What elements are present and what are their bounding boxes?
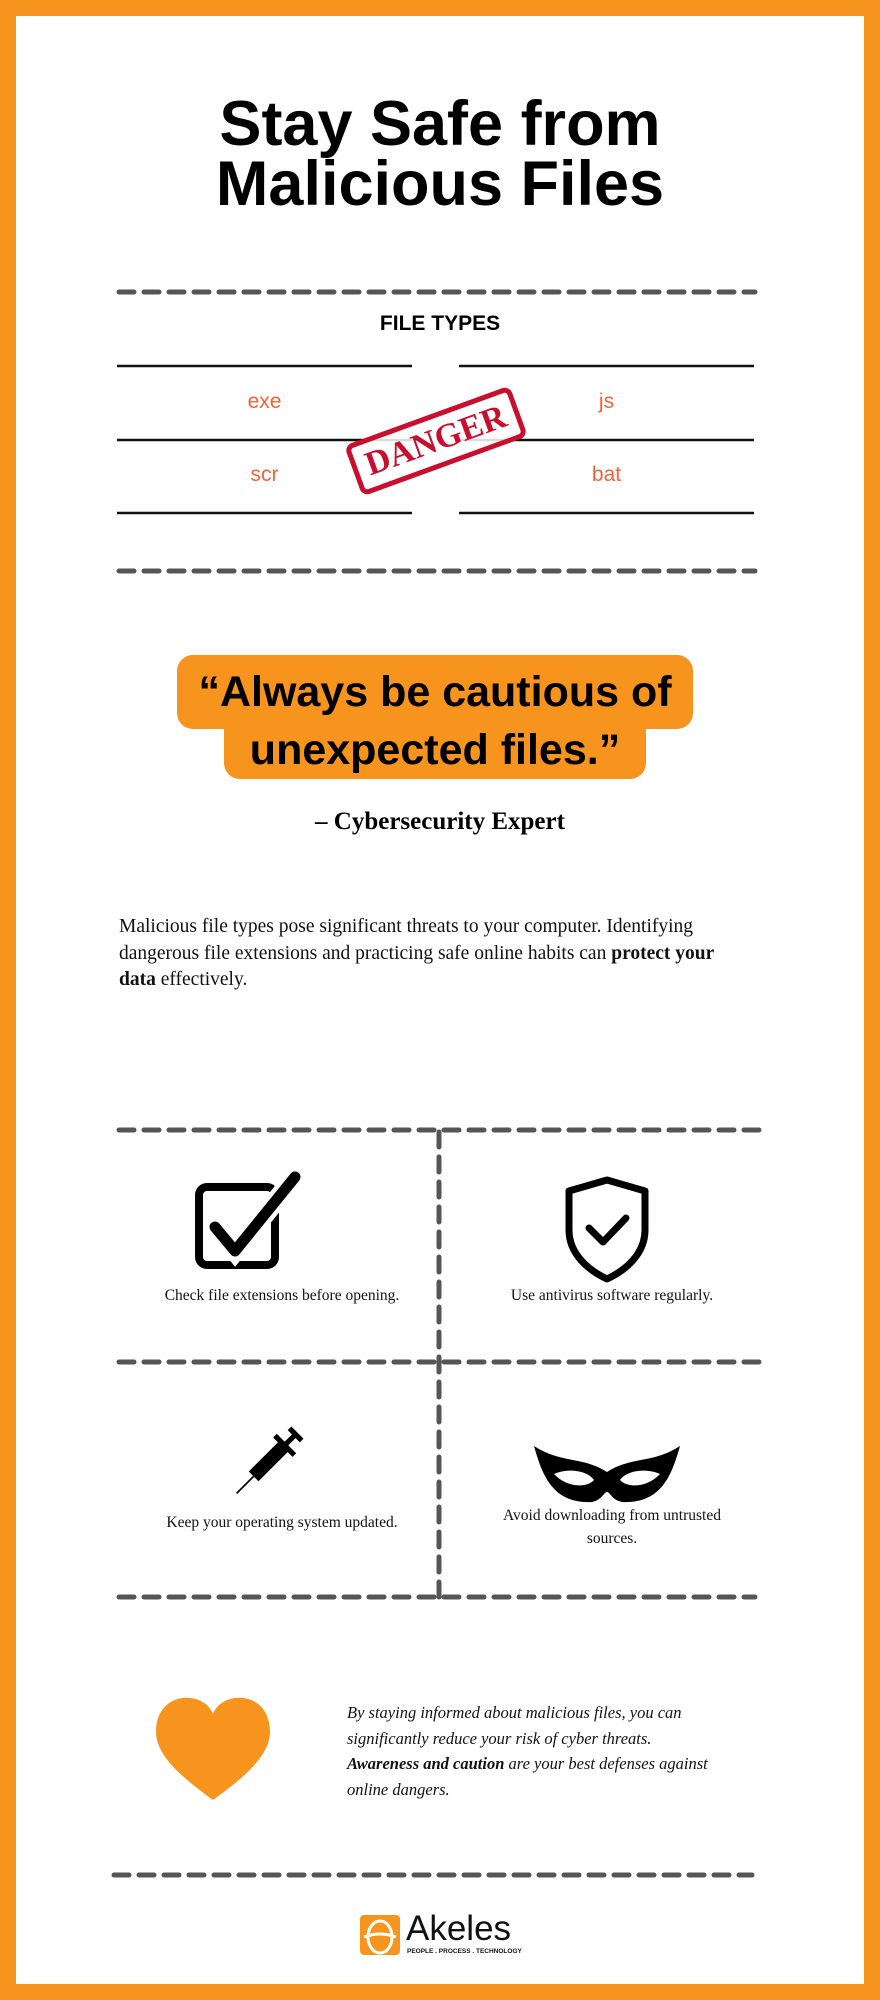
text: Keep your operating system updated. [166,1514,398,1531]
tip: updates [166,1426,398,1531]
logo [360,1909,522,1955]
closing text: significantly reduce your risk of cyber threats. [347,1728,651,1748]
title: Malicious Files [216,149,664,219]
tip: check extensions [165,1172,399,1304]
closing text: online dangers. [347,1780,450,1798]
attribution: – Cybersecurity Expert [315,808,565,835]
file type: bat: bat [592,463,621,486]
closing text: By staying informed about malicious files, you can [347,1703,682,1722]
file type: exe: exe [248,390,281,413]
quote callout [177,655,693,779]
title [216,89,664,219]
icon: shield [566,1176,648,1282]
closing text: Awareness and caution are your best defenses against [347,1754,708,1773]
icon: syringe [236,1426,304,1494]
intro paragraph: Malicious file types pose significant threats to your computer. Identifying dangerous file extensions and practicing safe online habits can protect your data effectively. [119,916,714,990]
text: Avoid downloading from untrusted sources. [503,1507,721,1547]
icon: mask [534,1446,680,1502]
icon: checkbox [195,1172,300,1269]
logo icon [360,1915,400,1955]
quote callout: “Always be cautious of [198,668,672,716]
danger stamp: DANGER [360,398,511,483]
closing text [346,1703,708,1798]
tip: untrusted sources [503,1446,721,1547]
logo text: Akeles [406,1909,511,1948]
text: Check file extensions before opening. [165,1287,399,1304]
danger stamp [344,386,528,496]
file type: js: js [599,390,614,413]
icon: heart [156,1698,270,1800]
text: Use antivirus software regularly. [511,1287,713,1304]
file type: scr: scr [250,463,278,486]
title: Stay Safe from [219,89,661,159]
quote callout: unexpected files.” [250,726,620,774]
tip: antivirus [511,1176,713,1304]
heading: file types: FILE TYPES [380,312,500,335]
logo: PEOPLE . PROCESS . TECHNOLOGY [407,1948,522,1955]
